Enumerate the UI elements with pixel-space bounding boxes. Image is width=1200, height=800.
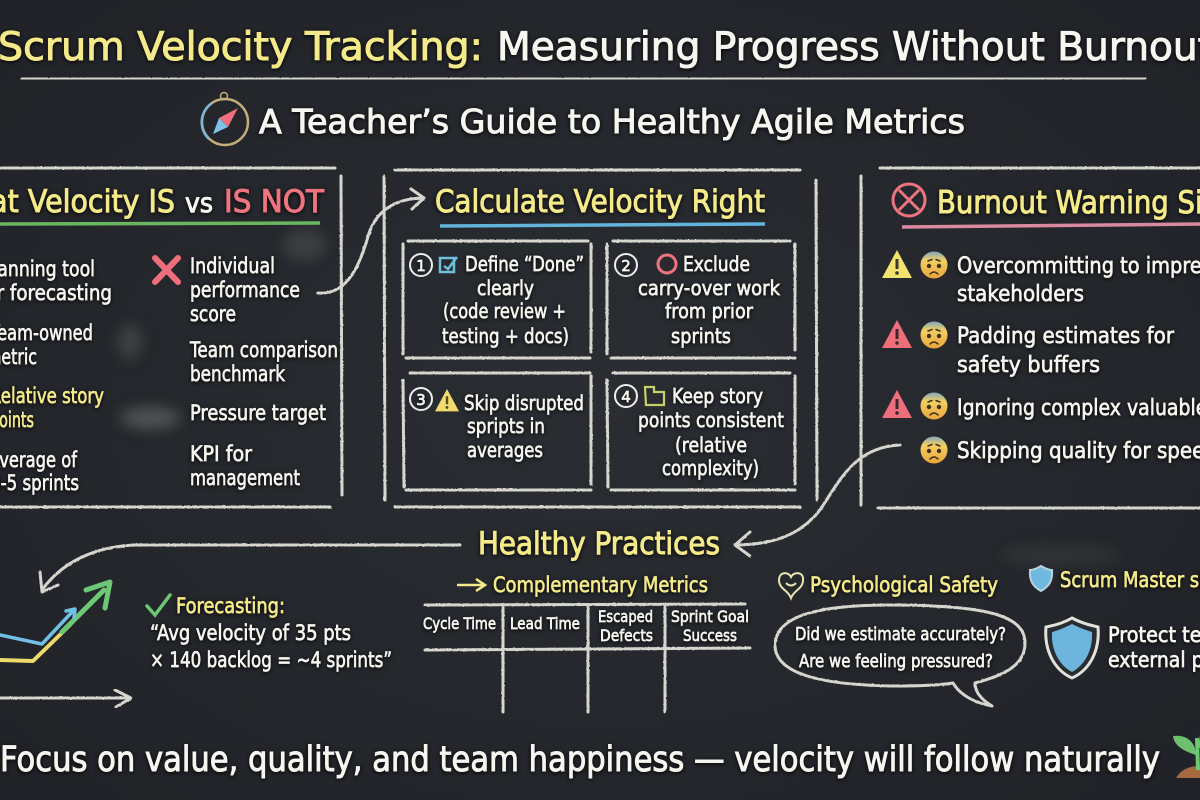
step 4: Keep story xyxy=(672,384,763,408)
panel frame xyxy=(384,170,817,507)
title: Measuring Progress Without Burnout xyxy=(497,25,1200,70)
heading underline xyxy=(902,224,1200,227)
heading: Calculate Velocity Right xyxy=(435,184,765,220)
step 1: 1 xyxy=(416,257,426,275)
step 2: 2 xyxy=(621,257,631,275)
heading: vs xyxy=(185,188,213,219)
green line xyxy=(62,582,110,632)
warning 1 xyxy=(882,250,1200,307)
arrow: performance score to calculate velocity xyxy=(318,189,424,293)
forecasting note: “Avg velocity of 35 pts xyxy=(150,621,351,645)
scrum master shields xyxy=(1030,566,1200,678)
step 2: sprints xyxy=(671,324,731,348)
heading: IS NOT xyxy=(224,184,325,220)
step 3: averages xyxy=(467,438,543,462)
list: velocity is not xyxy=(189,254,338,490)
heading underline xyxy=(0,223,320,224)
list: velocity is not: score xyxy=(190,302,236,326)
step 3 xyxy=(403,373,591,490)
icon: small shield xyxy=(1030,566,1052,591)
blue line xyxy=(0,609,75,644)
table headers xyxy=(423,607,749,645)
panel frame xyxy=(0,168,342,507)
icon: green check xyxy=(147,595,170,615)
step 1: Define “Done” xyxy=(465,252,584,276)
step 1: testing + docs) xyxy=(442,324,569,348)
table headers: Cycle Time xyxy=(423,614,496,633)
speech bubble xyxy=(775,605,1025,706)
step 2: carry-over work xyxy=(638,276,780,300)
step 4: 4 xyxy=(621,388,631,406)
step 4 xyxy=(607,373,795,490)
step 2: from prior xyxy=(665,299,753,323)
subheading: Psychological Safety xyxy=(810,573,998,597)
warning 2: safety buffers xyxy=(957,353,1100,378)
subtitle text: A Teacher’s Guide to Healthy Agile Metrics xyxy=(259,102,965,141)
warning 3 xyxy=(882,390,1200,421)
step 1: clearly xyxy=(477,276,534,300)
icon: seedling xyxy=(1173,734,1200,778)
bubble text xyxy=(795,624,1006,672)
forecasting note: × 140 backlog = ~4 sprints” xyxy=(150,648,392,672)
list: velocity is xyxy=(0,257,112,495)
chart: velocity trend xyxy=(0,582,131,707)
chalk smudges xyxy=(118,229,1120,565)
step 4: complexity) xyxy=(662,456,759,480)
icon: red cross xyxy=(155,258,178,282)
heading underline xyxy=(440,224,765,226)
list: velocity is not: Pressure target xyxy=(190,401,326,425)
table headers: Defects xyxy=(600,626,653,645)
psychological safety xyxy=(775,573,1025,706)
arrow: healthy practices to chart xyxy=(40,545,460,592)
panel frame xyxy=(861,168,1200,508)
subheading: Complementary Metrics xyxy=(493,573,708,597)
axis xyxy=(0,690,131,707)
list: velocity is not: benchmark xyxy=(190,362,286,386)
subtitle with compass xyxy=(202,92,965,145)
step 2 xyxy=(607,241,795,358)
title xyxy=(0,25,1200,70)
table headers: Lead Time xyxy=(510,614,580,633)
bubble text: Did we estimate accurately? xyxy=(795,624,1006,645)
list: velocity is not: Team comparison xyxy=(189,338,338,362)
forecasting note: Forecasting: xyxy=(176,594,285,618)
list: velocity is not: KPI for xyxy=(190,442,252,466)
complementary metrics xyxy=(423,573,750,712)
bubble text: Are we feeling pressured? xyxy=(799,651,993,672)
step 4: points consistent xyxy=(638,408,784,432)
icon: compass xyxy=(202,92,248,145)
yellow line xyxy=(0,625,70,661)
list: velocity is not: Individual xyxy=(190,254,275,278)
title underline xyxy=(22,78,1145,79)
table headers: Success xyxy=(683,626,737,645)
arrow: metrics xyxy=(457,579,485,591)
warning 2 xyxy=(882,320,1175,378)
panel: burnout warning signs xyxy=(861,168,1200,508)
icon: heart xyxy=(779,573,803,598)
table grid xyxy=(425,604,750,712)
step 3: Skip disrupted xyxy=(464,391,584,415)
list: velocity is not: performance xyxy=(190,278,300,302)
icon: warning circle xyxy=(893,184,925,216)
step 1: (code review + xyxy=(443,299,566,323)
panel: what velocity is vs is not xyxy=(0,168,342,507)
step 2: Exclude xyxy=(683,252,750,276)
step 3: spripts in xyxy=(467,414,545,438)
step 1 xyxy=(403,241,591,358)
arrow: burnout to healthy practices xyxy=(735,445,900,556)
heading: healthy practices: Healthy Practices xyxy=(478,526,720,562)
panel: calculate velocity right xyxy=(384,170,817,507)
heading xyxy=(0,184,325,220)
table headers: Escaped xyxy=(598,607,653,626)
icon: large shield xyxy=(1046,618,1098,678)
forecasting note xyxy=(147,594,392,672)
warning 2: Padding estimates for xyxy=(957,324,1175,349)
shield text xyxy=(1108,623,1200,672)
title: Scrum Velocity Tracking: xyxy=(0,25,483,70)
table headers: Sprint Goal xyxy=(671,607,749,626)
list: velocity is not: management xyxy=(190,466,300,490)
step 3: 3 xyxy=(416,391,426,409)
step 4: (relative xyxy=(675,433,747,457)
warning 1: stakeholders xyxy=(957,282,1084,307)
